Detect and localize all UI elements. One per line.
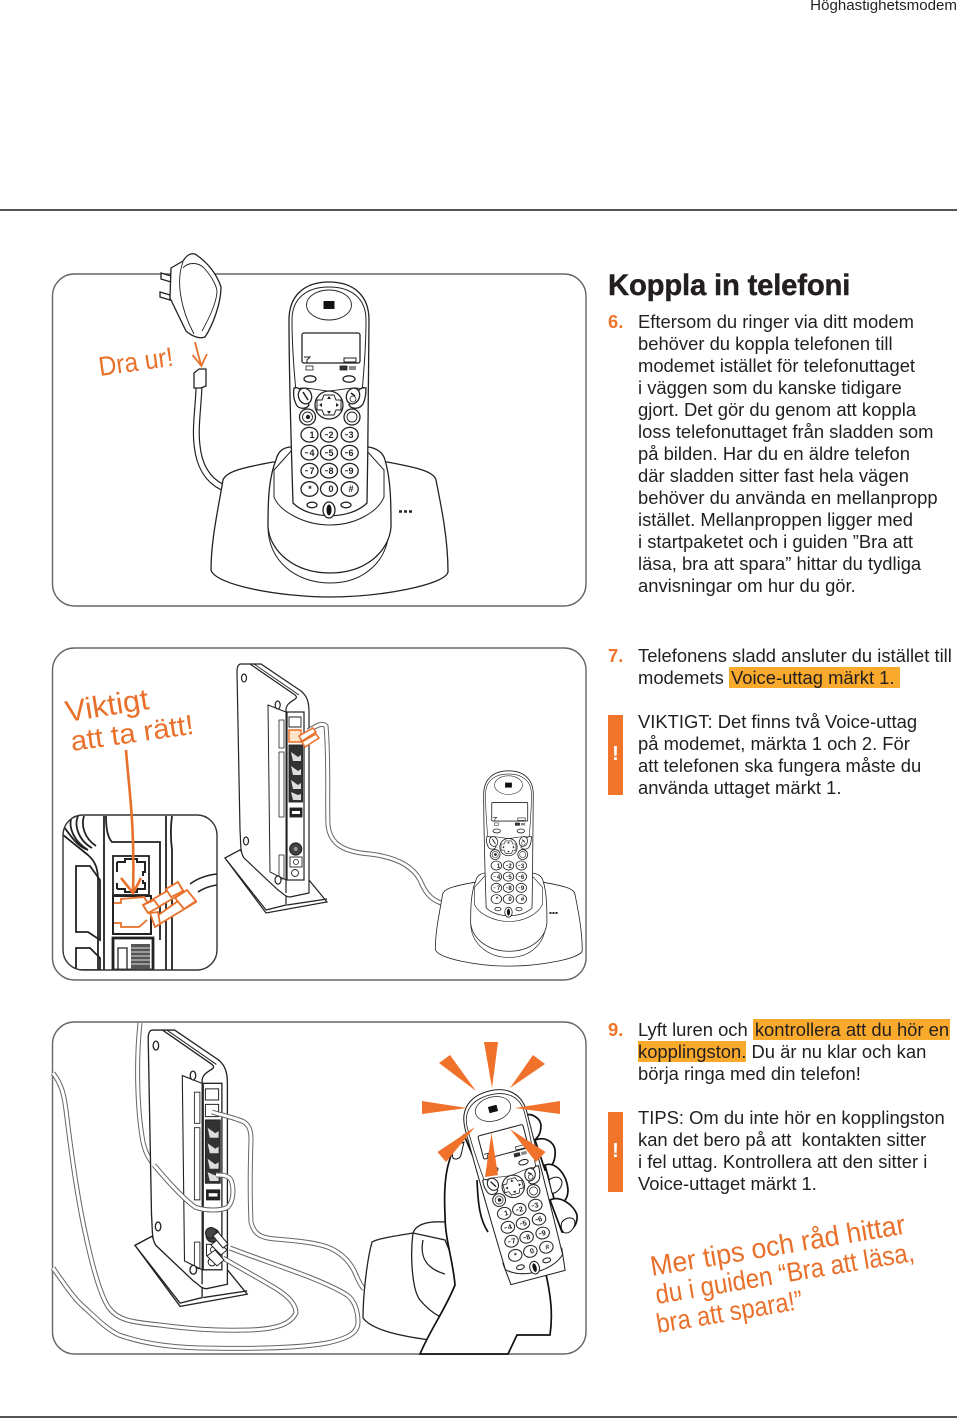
icon: hand holding phone [420,1115,577,1354]
icon: power and coax plugs [206,1228,228,1266]
keypad digits rotated phone: 3 [533,1200,539,1210]
icon: wall plug [160,254,221,338]
keypad digits rotated phone: 7 [510,1236,517,1246]
keypad digits: * [308,484,312,494]
handwritten note: more tips: bra att spara!” [654,1285,805,1339]
inset frame [63,815,217,970]
warning flag [608,715,623,795]
step 6 text: läsa, bra att spara” hittar du tydliga [638,553,921,574]
keypad digits: 3 [348,430,354,440]
step 6 text: Eftersom du ringer via ditt modem [638,311,914,332]
tips text: Voice-uttaget märkt 1. [638,1173,817,1194]
keypad digits: 7 [309,466,315,476]
step number 6: 6. [608,311,623,332]
step 6 text: modemet istället för telefonuttaget [638,355,915,376]
icon: cables behind modem [138,1023,160,1170]
step 6 text: anvisningar om hur du gör. [638,575,856,596]
keypad digits: 4 [309,448,315,458]
keypad digits rotated phone [502,1200,550,1260]
footer rule [0,1416,957,1418]
step 6 text [638,311,938,596]
keypad digits rotated phone: 0 [529,1246,535,1256]
arrow: pull out [192,342,207,366]
handwritten note: more tips: Mer tips och råd hittar [648,1209,907,1282]
keypad digits [308,430,354,494]
handwritten note: Dra ur: Dra ur! [97,342,175,382]
keypad digits: 9 [348,466,354,476]
keypad digits small phone: 3 [521,864,525,870]
panel: step 7 illustration [52,648,586,980]
step number 9: 9. [608,1019,623,1040]
keypad digits: # [348,484,354,494]
icon: modem with connected cables [135,1030,247,1306]
keypad digits: 2 [328,430,334,440]
keypad digits: 0 [328,484,334,494]
step 9 text [638,1019,950,1084]
step 6 text: där sladden sitter fast hela vägen [638,465,909,486]
warning text: att telefonen ska fungera måste du [638,755,921,776]
step 6 text: loss telefonuttaget från sladden som [638,421,933,442]
tips flag [608,1112,623,1192]
icon: orange plug outlines [143,882,196,927]
header rule [0,209,957,210]
step number 7: 7. [608,645,623,666]
tips text: i fel uttag. Kontrollera att den sitter i [638,1151,927,1172]
icon: base indicator dots [399,510,412,513]
keypad digits rotated phone: 6 [537,1214,543,1224]
keypad digits small phone: # [521,897,525,903]
step 6 text: behöver du koppla telefonen till [638,333,893,354]
warning text: använda uttaget märkt 1. [638,777,841,798]
icon: connected cables [53,1073,364,1348]
tips text [638,1107,945,1194]
keypad digits small phone: 5 [508,875,512,881]
step 7 text [638,645,952,688]
keypad digits small phone: * [496,897,499,903]
step 9 text: börja ringa med din telefon! [638,1063,861,1084]
icon: phone base station [211,447,448,597]
keypad digits small phone: 0 [508,897,512,903]
step 9 text: Lyft luren och kontrollera att du hör en [638,1019,949,1040]
handwritten note: Viktigt att ta rätt: att ta rätt! [69,709,196,757]
keypad digits rotated phone: 4 [507,1222,513,1232]
keypad digits: 6 [348,448,354,458]
icon: telephone cord [196,388,222,487]
panel: step 6 illustration [52,254,586,606]
step 7 text: modemets Voice-uttag märkt 1. [638,667,895,688]
icon: orange port outline [114,897,149,927]
tips flag: ! [612,1140,619,1162]
keypad digits small phone: 2 [508,864,512,870]
keypad digits rotated phone: # [544,1242,550,1252]
icon: small base station [435,771,582,966]
icon: orange voice plug [289,728,319,747]
icon: base station behind hand [363,1222,470,1340]
step 6 text: gjort. Det gör du genom att koppla [638,399,916,420]
inset: close-up of voice port [63,815,217,970]
keypad digits small phone: 4 [497,875,501,881]
step 6 text: behöver du använda en mellanpropp [638,487,938,508]
keypad digits: 1 [309,430,315,440]
step 6 text: i startpaketet och i guiden ”Bra att [638,531,913,552]
icon: orange ringing rays [422,1042,560,1177]
step 9 text: kopplingston. Du är nu klar och kan [638,1041,926,1062]
title: Koppla in telefoni [608,269,850,302]
tips text: TIPS: Om du inte hör en kopplingston [638,1107,945,1128]
icon: modem [225,664,327,913]
handwritten note: Viktigt att ta rätt [63,683,196,757]
keypad digits small phone: 8 [508,886,512,892]
keypad digits rotated phone: * [513,1250,518,1260]
handwritten note: more tips: du i guiden “Bra att läsa, [653,1237,916,1310]
keypad digits small phone: 6 [521,875,525,881]
keypad digits rotated phone: 9 [541,1228,547,1238]
step 6 text: på bilden. Har du en äldre telefon [638,443,910,464]
warning text: VIKTIGT: Det finns två Voice-uttag [638,711,917,732]
handwritten note: Viktigt att ta rätt: Viktigt [63,683,152,729]
icon: cordless phone [289,282,369,518]
warning text [638,711,921,798]
step 6 text: i väggen som du kanske tidigare [638,377,902,398]
tips text: kan det bero på att kontakten sitter [638,1129,926,1150]
keypad digits small phone [496,864,525,903]
arrow: to voice port 1 [121,750,141,893]
keypad digits rotated phone: 5 [521,1218,528,1228]
step 7 text: Telefonens sladd ansluter du istället till [638,645,952,666]
keypad digits small phone: 9 [521,886,525,892]
step 6 text: istället. Mellanproppen ligger med [638,509,913,530]
icon: small base dots [550,912,558,914]
panel: step 9 illustration [52,1022,586,1354]
icon: handset in hand [457,1083,568,1286]
icon: voice cable to phone [308,724,441,903]
keypad digits small phone: 1 [497,864,501,870]
warning text: på modemet, märkta 1 och 2. För [638,733,910,754]
icon: cable to inset plug [190,874,217,892]
keypad digits rotated phone: 1 [503,1208,509,1218]
icon: RJ11 connector [194,369,206,388]
keypad digits: 5 [328,448,334,458]
keypad digits rotated phone: 8 [525,1232,531,1242]
handwritten note: more tips [648,1209,916,1339]
keypad digits small phone: 7 [497,886,501,892]
keypad digits rotated phone: 2 [518,1204,524,1214]
keypad digits: 8 [328,466,334,476]
warning flag: ! [612,743,619,765]
